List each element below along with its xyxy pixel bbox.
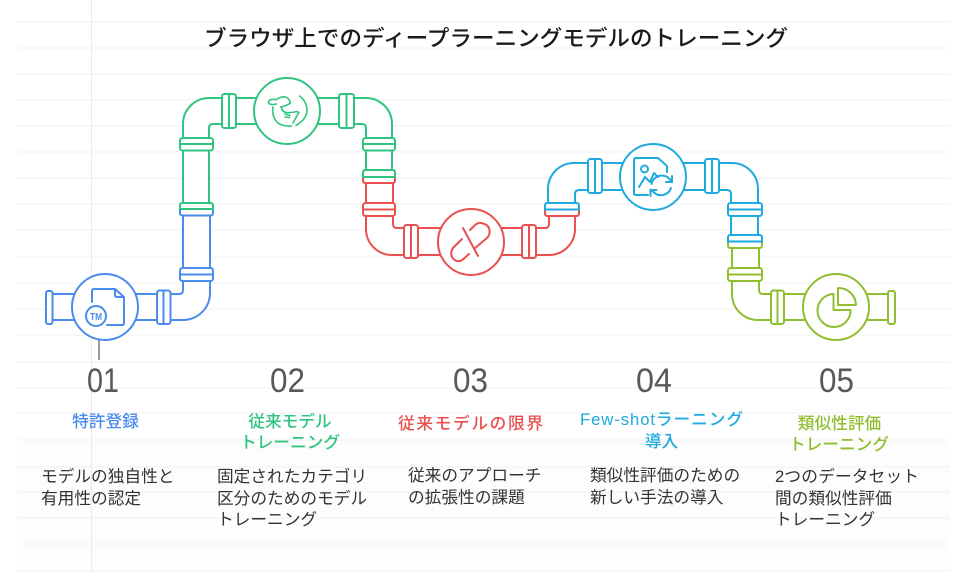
step 04: Few-shotラーニング [580,410,743,429]
step 05: トレーニング [789,435,889,454]
step 05: 類似性評価 [798,414,881,433]
step 05 [775,362,919,529]
collar: lime and cyan joint [728,235,762,248]
step 01: 特許登録 [72,412,139,431]
step 01: モデルの独自性と [41,466,174,486]
icon: image document with refresh [620,144,686,210]
step 02: 区分のためのモデル [217,488,367,508]
collar: red and green joint [363,170,395,183]
step 03: 従来モデルの限界 [398,413,543,433]
step 02: 固定されたカテゴリ [217,466,367,486]
step 02: 従来モデル [248,411,332,431]
step 02: トレーニング [240,433,340,452]
pipe section 02: green arch [180,94,395,209]
step 03: 従来のアプローチ [408,466,542,485]
step 05: 間の類似性評価 [775,489,892,508]
pipe section 04: cyan [548,159,762,241]
step 05: 05 [819,362,854,400]
icon: rat [254,78,320,144]
collar: blue and green joint [180,203,213,216]
step 04: 04 [636,362,672,400]
step 03 [398,362,543,507]
icon: pie chart [803,274,869,340]
step 02: 02 [270,362,305,400]
step 01 [41,362,174,508]
pipe section 05: lime [728,241,895,324]
title: ブラウザ上でのディープラーニングモデルのトレーニング [204,26,788,51]
step 02: トレーニング [217,510,317,529]
step 01: 01 [87,362,119,400]
step 05: 2つのデータセット [775,466,919,486]
icon: patent document [72,274,138,340]
pipe section 01: blue [46,209,213,324]
step 03: 03 [453,362,488,400]
pipe section 03: red [363,177,575,258]
step 04: 導入 [645,432,678,451]
icon: pill [438,209,504,275]
step 04: 新しい手法の導入 [590,488,724,507]
step 02 [217,362,367,529]
step 05: トレーニング [775,510,875,529]
icon: patent document: TM [90,311,102,323]
step 04: 類似性評価のための [590,466,740,485]
connector line [98,340,100,360]
step 04 [580,362,743,507]
step 01: 有用性の認定 [41,489,141,508]
step 03: の拡張性の課題 [408,488,525,507]
collar: cyan and red joint [545,203,579,216]
